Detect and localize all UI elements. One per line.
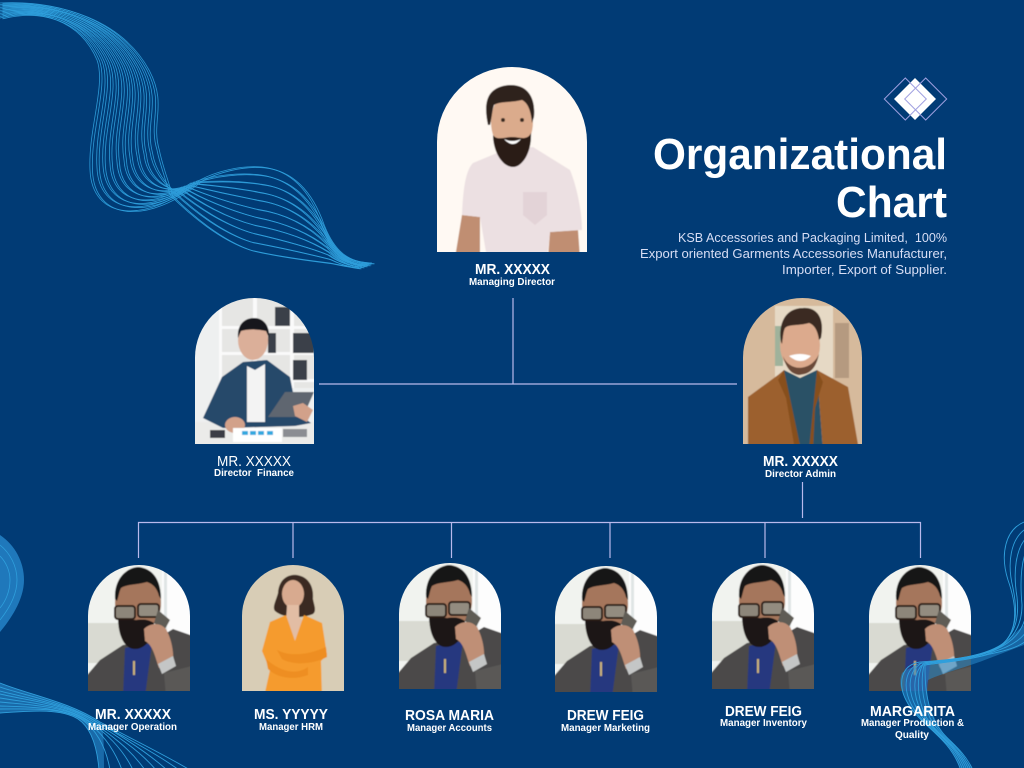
wave: bottom left (0, 683, 190, 768)
photo: managing director (437, 67, 587, 252)
title: Chart (836, 178, 947, 227)
label: manager accounts: Manager Accounts (407, 723, 492, 734)
icon: diamonds (884, 78, 947, 120)
photo: manager operation (82, 559, 196, 697)
label: managing director (469, 262, 555, 288)
label: director finance: Director Finance (214, 468, 294, 479)
label: managing director: Managing Director (469, 277, 555, 288)
label: manager inventory (720, 704, 807, 729)
photo: manager inventory (706, 557, 820, 695)
label: manager operation (88, 707, 177, 733)
wave: bottom right (900, 522, 1024, 768)
wave: left edge lobe (0, 535, 24, 632)
company description: Importer, Export of Supplier. (782, 262, 947, 277)
company description (640, 230, 947, 277)
label: director finance: MR. XXXXX (217, 454, 291, 470)
label: director admin: Director Admin (765, 469, 836, 480)
label: manager operation: Manager Operation (88, 722, 177, 733)
label: manager production and quality (861, 704, 964, 741)
label: director admin: MR. XXXXX (763, 454, 838, 470)
label: manager hrm (254, 707, 328, 733)
label: manager production and quality: Manager Production & (861, 718, 964, 729)
photo: manager hrm (236, 559, 350, 697)
label: manager production and quality: MARGARITA (870, 704, 956, 720)
connector lines (138, 298, 920, 558)
company description: Export oriented Garments Accessories Manufacturer, (640, 246, 947, 261)
title (653, 130, 947, 227)
photo: director admin (743, 298, 862, 444)
label: manager marketing: DREW FEIG (567, 708, 644, 724)
label: director finance (214, 454, 294, 479)
label: manager accounts (405, 708, 495, 734)
label: manager hrm: Manager HRM (259, 722, 323, 733)
label: manager hrm: MS. YYYYY (254, 707, 328, 723)
label: managing director: MR. XXXXX (475, 262, 550, 278)
title: Organizational (653, 130, 947, 179)
label: manager inventory: DREW FEIG (725, 704, 802, 720)
wave: top left (0, 3, 374, 269)
photo: manager production and quality (863, 559, 977, 697)
label: manager production and quality: Quality (895, 730, 929, 741)
photo: manager accounts (393, 557, 507, 695)
label: manager operation: MR. XXXXX (95, 707, 171, 723)
company description: KSB Accessories and Packaging Limited, 100% (678, 230, 947, 245)
label: manager accounts: ROSA MARIA (405, 708, 495, 724)
photo: manager marketing (549, 560, 663, 698)
photo: director finance (195, 298, 314, 444)
label: director admin (763, 454, 838, 480)
label: manager marketing: Manager Marketing (561, 723, 650, 734)
label: manager marketing (561, 708, 650, 734)
label: manager inventory: Manager Inventory (720, 718, 807, 729)
